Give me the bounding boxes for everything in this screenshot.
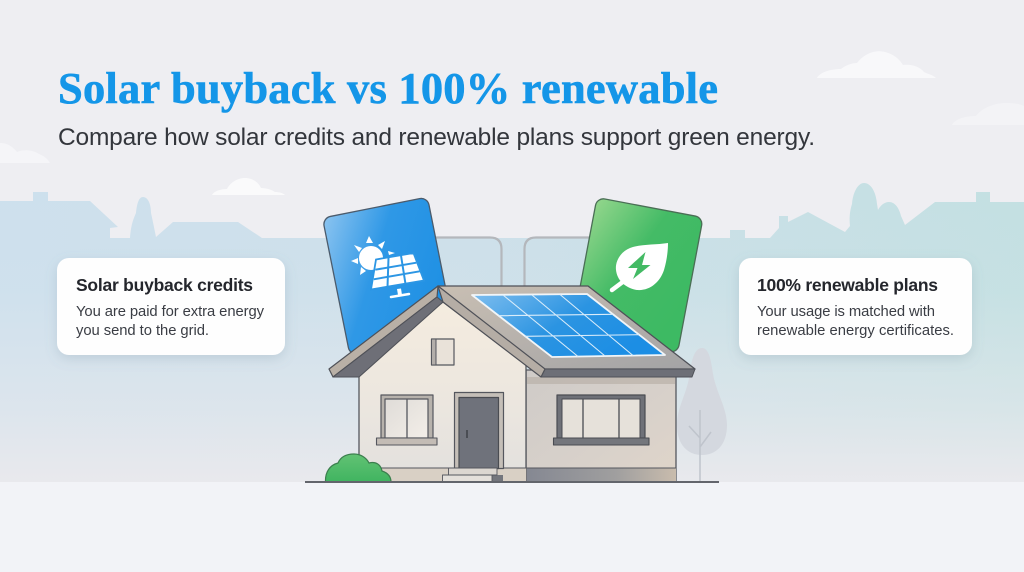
text: renewable description: renewable energy certificates. <box>757 323 954 339</box>
right window <box>554 395 649 445</box>
side wall roof shadow <box>527 377 675 384</box>
ground line <box>305 481 719 483</box>
steps <box>442 468 503 482</box>
text: solar description <box>76 304 265 339</box>
icon card: renewable <box>571 198 703 353</box>
door <box>454 392 504 468</box>
left window <box>376 395 437 445</box>
title: Solar buyback vs 100% renewable <box>58 63 718 113</box>
left roof underside <box>333 297 443 377</box>
icon card: solar <box>322 197 455 355</box>
front wall plinth <box>360 468 526 482</box>
text: solar description: you send to the grid. <box>76 323 209 339</box>
roof fascia <box>541 369 695 377</box>
left roof rake <box>329 286 438 377</box>
rooftop solar panel <box>472 294 665 357</box>
front wall <box>359 302 526 482</box>
gable window <box>432 339 454 365</box>
text: renewable description <box>757 304 954 339</box>
text: renewable description: Your usage is matched with <box>757 304 935 320</box>
cloud: far left <box>0 143 50 163</box>
ground band <box>0 482 1024 572</box>
heading: solar buyback credits: Solar buyback credits <box>76 275 253 295</box>
panel: 100% renewable plans <box>739 258 972 355</box>
icon: sun and solar panel <box>351 236 424 297</box>
bush <box>325 454 391 482</box>
main roof plane <box>438 286 695 369</box>
right roof rake <box>438 286 545 377</box>
cloud: top right <box>817 51 936 78</box>
cloud: center left <box>212 178 285 195</box>
cloud: far right <box>952 103 1024 125</box>
subtitle: Compare how solar credits and renewable plans support green energy. <box>58 124 815 151</box>
house <box>329 286 695 482</box>
icon: leaf with lightning bolt <box>612 243 668 290</box>
side wall <box>526 370 676 482</box>
text: solar description: You are paid for extra energy <box>76 304 265 320</box>
skyline: houses and trees silhouette <box>0 183 1024 483</box>
heading: 100% renewable plans: 100% renewable plans <box>757 275 938 295</box>
side wall plinth <box>527 468 676 482</box>
panel: solar buyback credits <box>57 258 285 355</box>
wires connecting cards to house <box>436 238 592 288</box>
background tree <box>677 348 727 482</box>
